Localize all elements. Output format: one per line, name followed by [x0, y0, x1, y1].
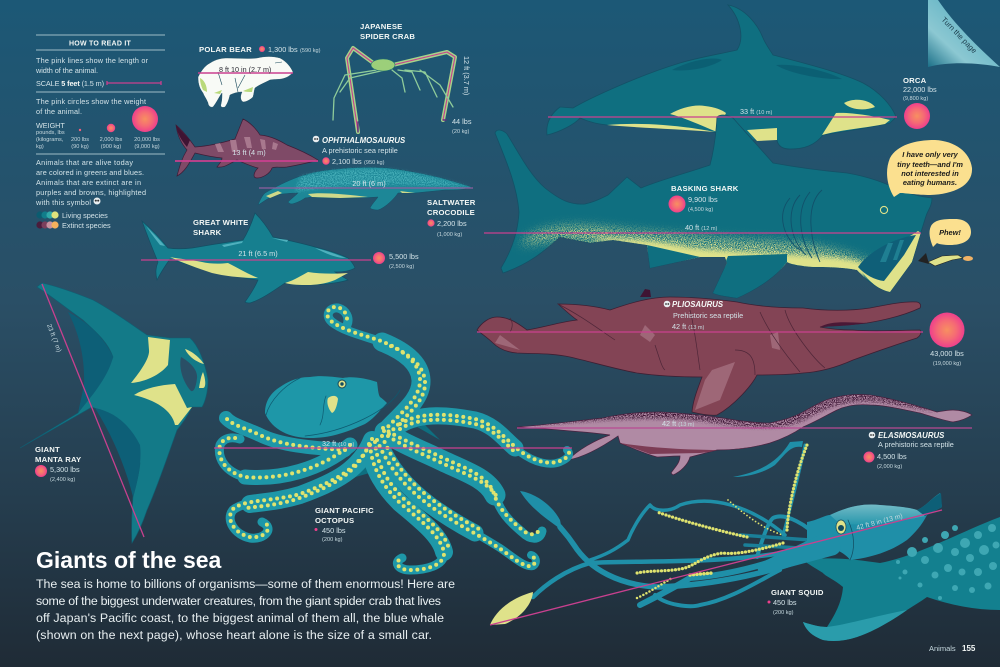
label: great white: GREAT WHITE — [193, 218, 248, 227]
label: spider crab: 12 ft (3.7 m) — [462, 56, 471, 95]
giant pacific octopus — [219, 307, 569, 570]
label: elasmosaurus: A prehistoric sea reptile — [878, 440, 954, 449]
label: squid: 42 ft 8 in (13 m) — [856, 513, 904, 532]
legend: species colours — [36, 211, 111, 230]
label: basking shark: 9,900 lbs — [688, 195, 718, 204]
label: basking shark: 40 ft (12 m) — [685, 223, 718, 232]
label: octopus: GIANT PACIFIC — [315, 506, 374, 515]
label: great white — [193, 218, 419, 270]
phew bubble: Phew! — [939, 228, 961, 237]
label: orca: ORCA — [903, 76, 927, 85]
label: pliosaurus: 43,000 lbs — [930, 349, 964, 358]
legend: species colours: Extinct species — [62, 221, 111, 230]
weight legend: 200 lbs — [71, 137, 89, 143]
legend: species colours: Living species — [62, 211, 108, 220]
text: pink circles explanation: The pink circles show the weight — [36, 97, 146, 106]
label: ophthalmosaurus: A prehistoric sea reptile — [322, 146, 398, 155]
label: spider crab: 44 lbs — [452, 117, 472, 126]
squid sucker rows — [637, 445, 807, 598]
squid fin pieces — [520, 441, 803, 530]
speech bubble: not interested in — [901, 169, 959, 178]
weight legend: (900 kg) — [101, 144, 121, 150]
label: crocodile: 2,200 lbs — [437, 219, 467, 228]
intro text: The sea is home to billions of organisms—some of them enormous! Here are — [36, 577, 455, 591]
icon: skull — [94, 198, 100, 204]
label: great white: 5,500 lbs — [389, 252, 419, 261]
label: great white: (2,500 kg) — [389, 264, 414, 270]
label: polar bear: 1,300 lbs — [268, 45, 298, 54]
label: ophthalmosaurus: OPHTHALMOSAURUS — [322, 136, 406, 145]
label: crocodile: (1,000 kg) — [437, 232, 462, 238]
squid club — [490, 592, 533, 625]
label: squid: (200 kg) — [773, 610, 794, 616]
label: basking shark — [668, 184, 739, 232]
label: squid — [768, 513, 904, 616]
label: manta ray: 5,300 lbs — [50, 465, 80, 474]
weight legend — [36, 106, 160, 150]
whale fluke — [803, 517, 1000, 641]
label: manta ray — [35, 323, 81, 483]
pink measurement lines — [42, 73, 972, 625]
weight legend: (9,000 kg) — [134, 144, 160, 150]
label: spider crab — [360, 22, 472, 135]
label: orca — [740, 76, 937, 129]
label: polar bear — [199, 45, 321, 74]
label: manta ray: GIANT — [35, 445, 60, 454]
speech bubble: tiny teeth—and I'm — [897, 160, 963, 169]
label: spider crab: SPIDER CRAB — [360, 32, 415, 41]
label: crocodile: 20 ft (6 m) — [352, 179, 386, 188]
label: orca: 22,000 lbs — [903, 85, 937, 94]
label: pliosaurus: 42 ft (13 m) — [672, 322, 705, 331]
label: elasmosaurus: 42 ft (13 m) — [662, 419, 695, 428]
text: color coding: are colored in greens and blues. — [36, 168, 144, 177]
saltwater crocodile — [258, 167, 472, 210]
elasmosaurus — [517, 393, 972, 475]
giant squid — [490, 441, 942, 625]
text: color coding: Animals that are alive today — [36, 158, 133, 167]
label: squid: 450 lbs — [773, 598, 797, 607]
label: crocodile: CROCODILE — [427, 208, 475, 217]
text: color coding: Animals that are extinct are in — [36, 178, 141, 187]
text: color coding: with this symbol — [35, 198, 91, 207]
label: ophthalmosaurus: 13 ft (4 m) — [232, 148, 266, 157]
text: color coding: purples and browns, highlighted — [36, 188, 146, 197]
title: Giants of the sea — [36, 547, 222, 573]
speech bubble — [887, 140, 972, 197]
scale — [36, 79, 161, 88]
great white shark — [142, 213, 355, 303]
label: pliosaurus: PLIOSAURUS — [672, 300, 724, 309]
scale: SCALE 5 feet (1.5 m) — [36, 79, 104, 88]
label: pliosaurus — [664, 300, 964, 367]
label: spider crab: (20 kg) — [452, 129, 470, 135]
label: great white: 21 ft (6.5 m) — [238, 249, 278, 258]
footer: page number: 155 — [962, 644, 976, 653]
label: orca: 33 ft (10 m) — [740, 107, 773, 116]
label: spider crab: JAPANESE — [360, 22, 402, 31]
label: pliosaurus: Prehistoric sea reptile — [673, 311, 743, 320]
label: manta ray: MANTA RAY — [35, 455, 81, 464]
label: crocodile — [352, 179, 476, 238]
orca — [547, 5, 896, 149]
text: pink lines explanation: The pink lines show the length or — [36, 56, 149, 65]
panel: how to read it — [35, 35, 165, 230]
octopus head — [265, 376, 387, 438]
polar bear — [198, 56, 293, 107]
phew bubble — [930, 219, 971, 247]
label: basking shark: (4,500 kg) — [688, 207, 713, 213]
octopus suckers — [219, 307, 569, 570]
footer: page number: Animals — [929, 644, 956, 653]
japanese spider crab — [333, 48, 455, 132]
heading: how to read it: HOW TO READ IT — [69, 40, 132, 48]
page curl: turn the page: Turn the page — [940, 15, 979, 55]
label: octopus — [314, 439, 374, 543]
page curl: turn the page — [928, 0, 1000, 67]
label: orca: (9,800 kg) — [903, 96, 928, 102]
label: octopus: OCTOPUS — [315, 516, 354, 525]
label: elasmosaurus: 4,500 lbs — [877, 452, 907, 461]
label: crocodile: SALTWATER — [427, 198, 476, 207]
speech bubble: I have only very — [902, 150, 959, 159]
weight legend: 2,000 lbs — [100, 137, 123, 143]
label: elasmosaurus — [662, 419, 954, 470]
label: octopus: 32 ft (10 m) — [322, 439, 355, 448]
basking shark — [495, 115, 932, 298]
pliosaurus — [477, 289, 921, 415]
label: manta ray: 23 ft (7 m) — [45, 323, 62, 353]
label: ophthalmosaurus — [232, 136, 406, 166]
label: octopus: 450 lbs — [322, 526, 346, 535]
label: polar bear: POLAR BEAR — [199, 45, 252, 54]
label: octopus: (200 kg) — [322, 537, 343, 543]
label: pliosaurus: (19,000 kg) — [933, 361, 961, 367]
label: basking shark: BASKING SHARK — [671, 184, 739, 193]
ophthalmosaurus — [176, 119, 318, 178]
label: great white: SHARK — [193, 228, 222, 237]
label: polar bear: 8 ft 10 in (2.7 m) — [219, 65, 271, 74]
intro text: some of the biggest underwater creatures, from the giant spider crab that lives — [36, 594, 441, 608]
label: squid: GIANT SQUID — [771, 588, 824, 597]
label: ophthalmosaurus: (950 kg) — [364, 160, 385, 166]
label: elasmosaurus: ELASMOSAURUS — [878, 431, 945, 440]
speech bubble: eating humans. — [903, 178, 957, 187]
weight legend: (kilograms, — [36, 137, 64, 143]
squid tentacles — [533, 445, 820, 606]
intro text: off Japan's Pacific coast, to the biggest animal of them all, the blue whale — [36, 611, 444, 625]
label: polar bear: (590 kg) — [300, 48, 321, 54]
icon: diver — [918, 253, 973, 266]
text: pink circles explanation: of the animal. — [36, 107, 82, 116]
weight legend: kg) — [36, 144, 44, 150]
weight legend: pounds, lbs — [36, 130, 65, 136]
text: pink lines explanation: width of the animal. — [35, 66, 98, 75]
footer: page number — [929, 644, 976, 653]
label: manta ray: (2,400 kg) — [50, 477, 75, 483]
intro text: (shown on the next page), whose heart alone is the size of a small car. — [36, 628, 432, 642]
giant manta ray — [20, 283, 208, 543]
weight legend: (90 kg) — [71, 144, 89, 150]
octopus webbing — [345, 420, 440, 480]
label: ophthalmosaurus: 2,100 lbs — [332, 157, 362, 166]
weight legend: WEIGHT — [36, 121, 65, 130]
label: elasmosaurus: (2,000 kg) — [877, 464, 902, 470]
weight legend: 20,000 lbs — [134, 137, 160, 143]
